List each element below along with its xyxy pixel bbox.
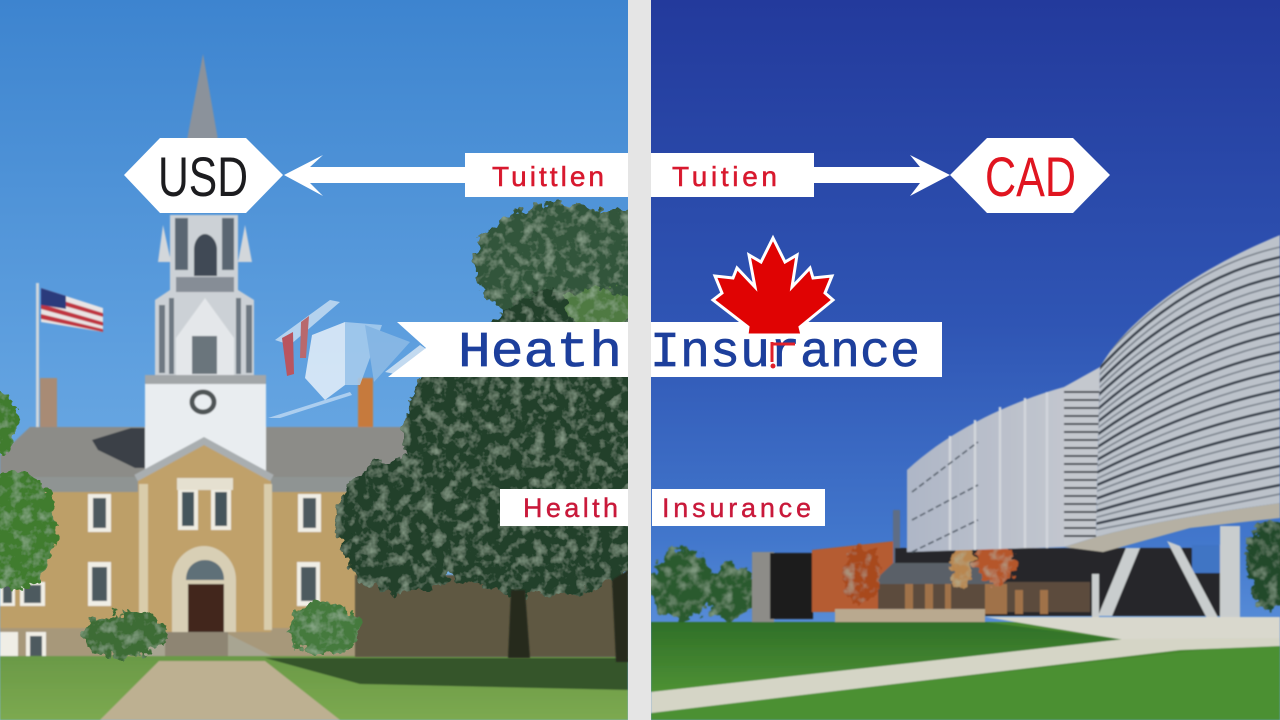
USD hexagon badge [124,138,283,213]
upper lawn [651,622,1125,694]
building columns [1092,526,1240,636]
icon: maple leaf [713,238,833,368]
window panes [3,498,316,656]
label: left Tuition: Tuittlen [492,161,604,192]
building soffit [1064,503,1280,552]
gable trim [136,441,272,478]
icon: American flag on pole [35,282,104,428]
scene: US campus (left half) [0,0,650,720]
central divider [628,0,651,720]
arrow: tuition to CAD [810,155,950,196]
dark pavilion [770,553,813,619]
tree: upper right [472,200,628,322]
tree: light foliage cluster [562,284,628,322]
spire [187,54,218,140]
foundation [0,628,370,658]
building walls [0,491,358,629]
label: small Health [500,489,628,526]
central pavilion [138,442,271,632]
CAD hexagon badge [950,138,1110,213]
tower belfry [155,215,254,375]
curved louvred volume [1090,230,1280,540]
hedge and lower wall shade [355,575,628,657]
tree trunks [508,570,628,662]
low roof [871,563,1000,584]
label: small Insurance: Insurance [662,493,811,523]
tower base [145,375,266,475]
middle section [1064,367,1100,547]
CAD label: CAD [985,145,1076,208]
walkway [100,661,340,720]
twin windows [177,478,233,530]
banner: Heath: Heath [458,325,622,382]
label: small Insurance [652,489,825,526]
flower beds [835,609,985,624]
tree: large dark oak [337,290,650,595]
tree: left edge [0,395,56,590]
belfry band [176,277,234,292]
brick pavilion [812,541,895,612]
ground base [651,622,1280,720]
scene: Canadian campus (right half) [650,0,1280,720]
entrance steps [165,632,228,660]
lamp post [893,510,900,580]
label: small Health: Health [523,493,618,523]
step cheek [144,634,271,656]
lawn shadow [265,658,628,690]
banner: Insurance: Insurance [650,325,920,382]
lower lawn [651,644,1280,720]
tower pinnacles [158,225,252,262]
curved left panel [907,387,1064,552]
timber fins [905,584,1048,614]
lower glazing [878,582,1090,612]
belfry dark louvres [175,218,234,270]
tower ledge [145,375,266,384]
plaza [985,617,1280,642]
roof shadow [92,428,146,468]
building cornice [0,477,360,492]
clock ornament [192,392,214,412]
pavilion quoins [139,484,272,630]
pedestrian path [651,638,1280,713]
chimney right [358,378,373,432]
middle section louvres [1064,392,1100,536]
sky gap [1192,545,1220,573]
chimney left [40,378,57,432]
banner: Heath [388,322,628,382]
gray pavilion [752,552,774,622]
tower window [192,336,217,374]
label: right Tuition: Tuitien [672,161,777,192]
arrow: tuition to USD [284,155,470,196]
belfry shaft shadows [159,298,252,374]
autumn trees [842,538,1015,603]
entrance arch [172,546,236,632]
bush right [289,602,361,654]
bush left [83,612,167,658]
door [188,584,224,632]
lawn left [0,656,628,720]
label: left Tuition [465,153,628,197]
fanlight [186,560,224,580]
tower gable [176,298,234,375]
panel seams [950,392,1047,550]
trees far left [650,549,756,621]
building roof [0,427,420,480]
label: right Tuition [651,153,814,197]
belfry arch [194,234,217,276]
USD label: USD [158,145,248,208]
paper and flag collage [268,300,428,418]
upper windows [0,494,321,658]
storey under building [895,548,1240,616]
tree far right [1246,521,1280,609]
panel window marks [912,442,978,552]
